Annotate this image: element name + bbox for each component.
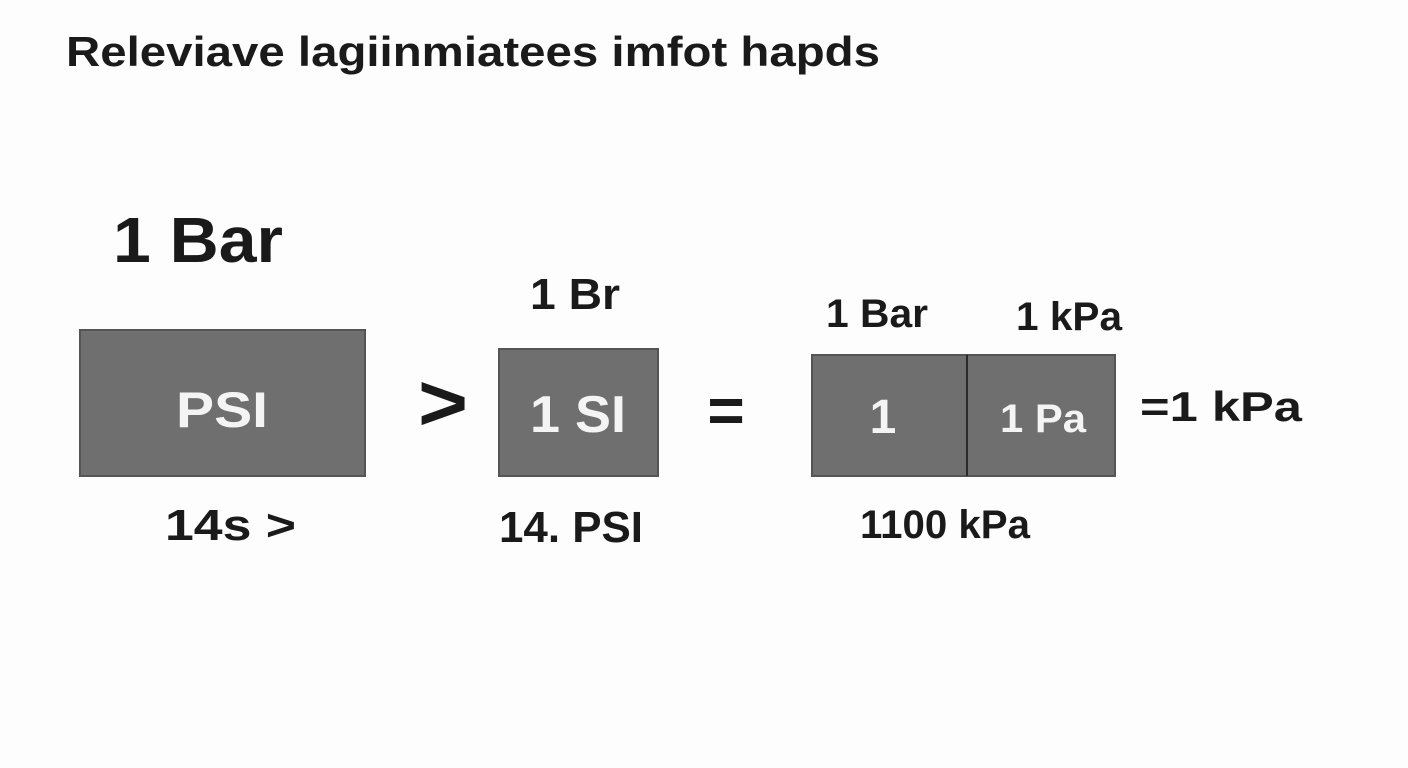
label: 1 Bar small: 1 Bar: [826, 292, 928, 336]
panel: PSI box: PSI: [176, 382, 268, 438]
panel: 1 SI box: [499, 349, 658, 476]
panel: PSI box: [80, 330, 365, 476]
heading: 1 Bar: 1 Bar: [113, 204, 283, 276]
label: 14. PSI: 14. PSI: [499, 503, 643, 552]
label: 1 Br: 1 Br: [530, 270, 620, 319]
label: 1100 kPa: 1100 kPa: [860, 503, 1031, 547]
panel: 1 SI box: 1 SI: [530, 386, 626, 444]
panel: split box: [812, 355, 1115, 476]
label: 1 kPa top: 1 kPa: [1016, 295, 1123, 339]
panel: split box: 1 Pa: [1000, 397, 1087, 441]
arrow: greater than: >: [418, 358, 468, 447]
result: =1 kPa: =1 kPa: [1140, 383, 1303, 430]
title: Releviave lagiinmiatees imfot hapds: [66, 28, 880, 75]
panel: split box: 1: [870, 391, 896, 444]
label: 14s >: 14s >: [165, 501, 296, 550]
equals sign: =: [707, 374, 745, 446]
